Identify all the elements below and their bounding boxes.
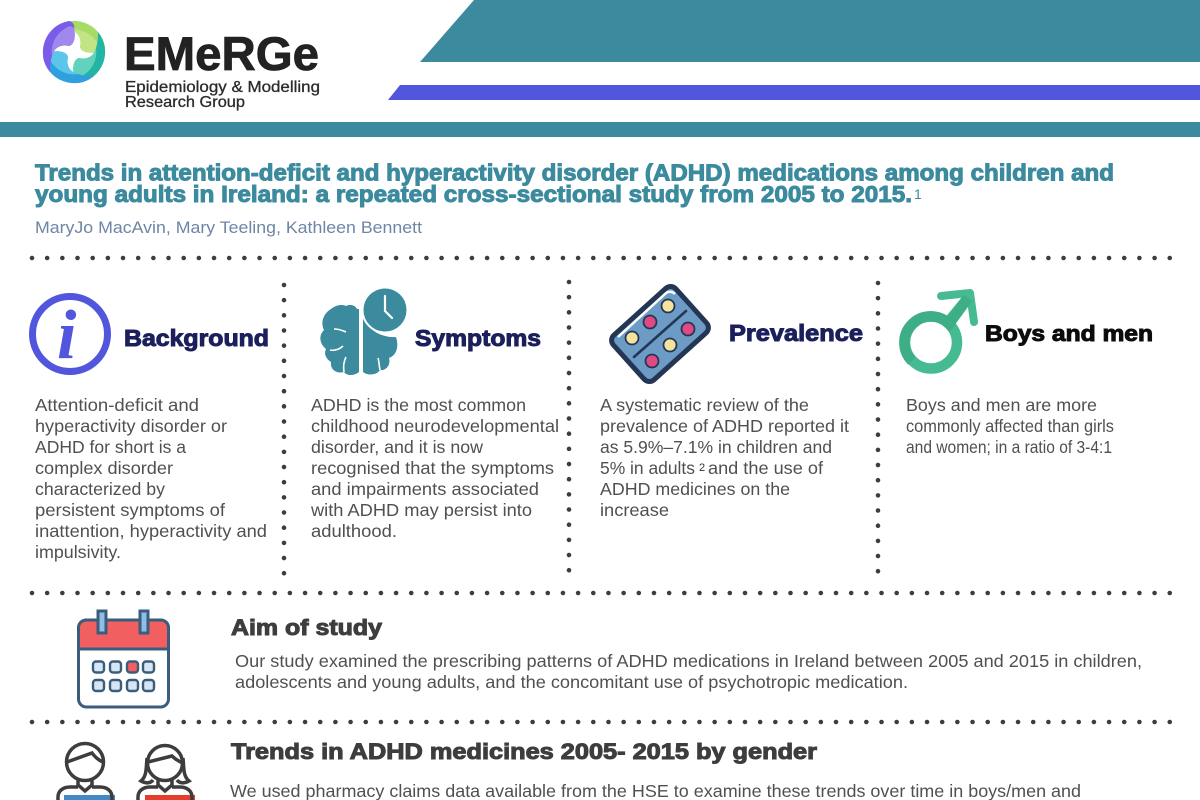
text: boys and men: and women; in a ratio of 3-4:1 <box>906 437 1112 457</box>
text: symptoms: and impairments associated <box>311 479 539 499</box>
icon: information: i <box>57 297 77 374</box>
text: background: hyperactivity disorder or <box>35 416 227 436</box>
heading: prevalence: Prevalence <box>729 320 863 346</box>
text: symptoms <box>310 395 559 541</box>
title <box>35 160 1114 207</box>
text: symptoms: disorder, and it is now <box>311 437 483 457</box>
icon: information <box>32 296 108 374</box>
text: prevalence: A systematic review of the <box>600 395 809 415</box>
text: boys and men <box>906 395 1114 457</box>
text: prevalence: prevalence of ADHD reported it <box>600 416 849 436</box>
icon: calendar <box>78 611 168 707</box>
logo wordmark: EMeRGe <box>124 27 319 80</box>
text: background <box>35 395 267 562</box>
text: prevalence: and the use of <box>708 458 823 478</box>
panel: background <box>32 296 269 562</box>
text: aim of study <box>235 651 1142 692</box>
text: background: complex disorder <box>35 458 173 478</box>
text: symptoms: childhood neurodevelopmental <box>311 416 559 436</box>
text: symptoms: recognised that the symptoms <box>311 458 554 478</box>
logo subtitle <box>125 79 320 111</box>
logo: EMeRGe <box>43 21 320 111</box>
text: aim of study: Our study examined the prescribing patterns of ADHD medications in Ireland between 2005 and 2015 in children, <box>235 651 1142 671</box>
text: background: inattention, hyperactivity and <box>35 521 267 541</box>
text: prevalence: 5% in adults <box>600 458 695 478</box>
panel: aim of study <box>78 611 1142 707</box>
text: background: characterized by <box>35 479 165 499</box>
text: symptoms: ADHD is the most common <box>311 395 526 415</box>
panel: boys and men <box>904 293 1153 457</box>
heading: symptoms: Symptoms <box>415 325 541 351</box>
header banner shapes <box>0 0 1200 137</box>
text: background: ADHD for short is a <box>35 437 186 457</box>
text: prevalence: 2 <box>699 462 705 474</box>
heading: aim of study: Aim of study <box>231 615 383 640</box>
text: background: Attention-deficit and <box>35 395 199 415</box>
text: boys and men: commonly affected than girls <box>906 416 1114 436</box>
text: prevalence: increase <box>600 500 669 520</box>
logo subtitle: Research Group <box>125 94 245 111</box>
icon: brain with clock <box>320 288 408 375</box>
text: prevalence: ADHD medicines on the <box>600 479 790 499</box>
logo subtitle: Epidemiology & Modelling <box>125 79 320 96</box>
heading: background: Background <box>124 325 269 351</box>
panel: trends by gender <box>58 739 1081 800</box>
authors: MaryJo MacAvin, Mary Teeling, Kathleen Bennett <box>35 218 422 237</box>
heading: trends by gender: Trends in ADHD medicines 2005- 2015 by gender <box>231 739 817 764</box>
heading: boys and men: Boys and men <box>985 321 1153 346</box>
text: symptoms: adulthood. <box>311 521 397 541</box>
icon: boy and girl figures <box>58 744 195 800</box>
title: 1 <box>914 186 922 202</box>
icon: male symbol <box>904 293 974 368</box>
text: prevalence: as 5.9%–7.1% in children and <box>600 437 832 457</box>
text: symptoms: with ADHD may persist into <box>310 500 532 520</box>
text: background: persistent symptoms of <box>35 500 225 520</box>
text: aim of study: adolescents and young adults, and the concomitant use of psychotropic medication. <box>235 672 908 692</box>
panel: prevalence <box>600 284 863 520</box>
icon: blister pack of pills <box>609 284 711 384</box>
text: prevalence <box>600 395 849 520</box>
text: background: impulsivity. <box>35 542 121 562</box>
title: young adults in Ireland: a repeated cross-sectional study from 2005 to 2015. <box>35 181 912 207</box>
title: Trends in attention-deficit and hyperactivity disorder (ADHD) medications among children and <box>35 160 1114 186</box>
text: boys and men: Boys and men are more <box>906 395 1097 415</box>
icon: logo swirl <box>43 21 105 83</box>
panel: symptoms <box>310 288 559 541</box>
